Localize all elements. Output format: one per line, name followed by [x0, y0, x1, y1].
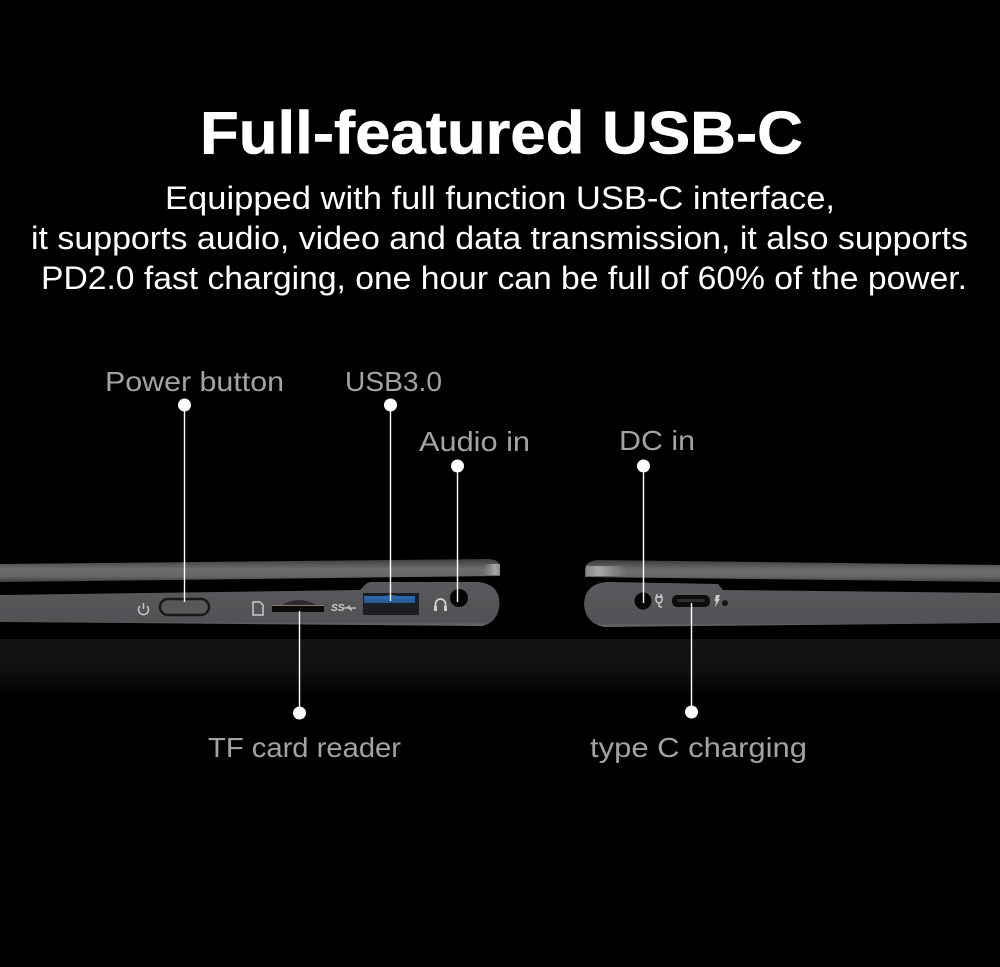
callout: Audio in: Audio in	[419, 426, 530, 457]
left lid	[0, 559, 500, 582]
description text	[31, 180, 968, 296]
callout: Audio in	[419, 426, 530, 602]
power button	[160, 599, 209, 615]
callout: USB3.0: USB3.0	[345, 366, 442, 397]
USB 3.0 port	[363, 593, 419, 615]
laptop left side	[0, 559, 500, 626]
title: Full-featured USB-C	[200, 100, 803, 166]
description text: PD2.0 fast charging, one hour can be full of 60% of the power.	[41, 260, 967, 296]
callout: TF card reader: TF card reader	[208, 732, 401, 763]
callout: USB3.0	[345, 366, 442, 601]
laptop right side	[584, 560, 1000, 627]
USB-C port	[672, 595, 710, 607]
headphone icon	[436, 599, 446, 611]
audio jack	[450, 589, 468, 607]
callout: TF card reader	[208, 611, 401, 763]
left lid highlight	[483, 564, 500, 575]
callout: type C charging	[590, 603, 807, 763]
floor glow band	[0, 639, 1000, 699]
plug icon	[656, 594, 662, 607]
right base	[584, 582, 1000, 627]
TF card slot	[272, 600, 324, 612]
description text: Equipped with full function USB-C interface,	[165, 180, 835, 216]
callout: type C charging: type C charging	[590, 732, 807, 763]
TF card icon	[253, 602, 263, 615]
charging bolt icon	[714, 595, 720, 607]
SuperSpeed USB icon	[331, 603, 356, 614]
right lid highlight	[586, 566, 628, 576]
callout: DC in: DC in	[619, 425, 695, 456]
SuperSpeed USB icon: SS	[331, 603, 345, 614]
DC jack	[634, 592, 652, 610]
callout: Power button: Power button	[105, 366, 284, 397]
indicator light	[722, 600, 728, 606]
callout: DC in	[619, 425, 695, 603]
description text: it supports audio, video and data transmission, it also supports	[31, 220, 968, 256]
right lid	[585, 560, 1000, 582]
power icon	[138, 603, 148, 615]
left base	[0, 582, 500, 626]
callout: Power button	[105, 366, 284, 602]
